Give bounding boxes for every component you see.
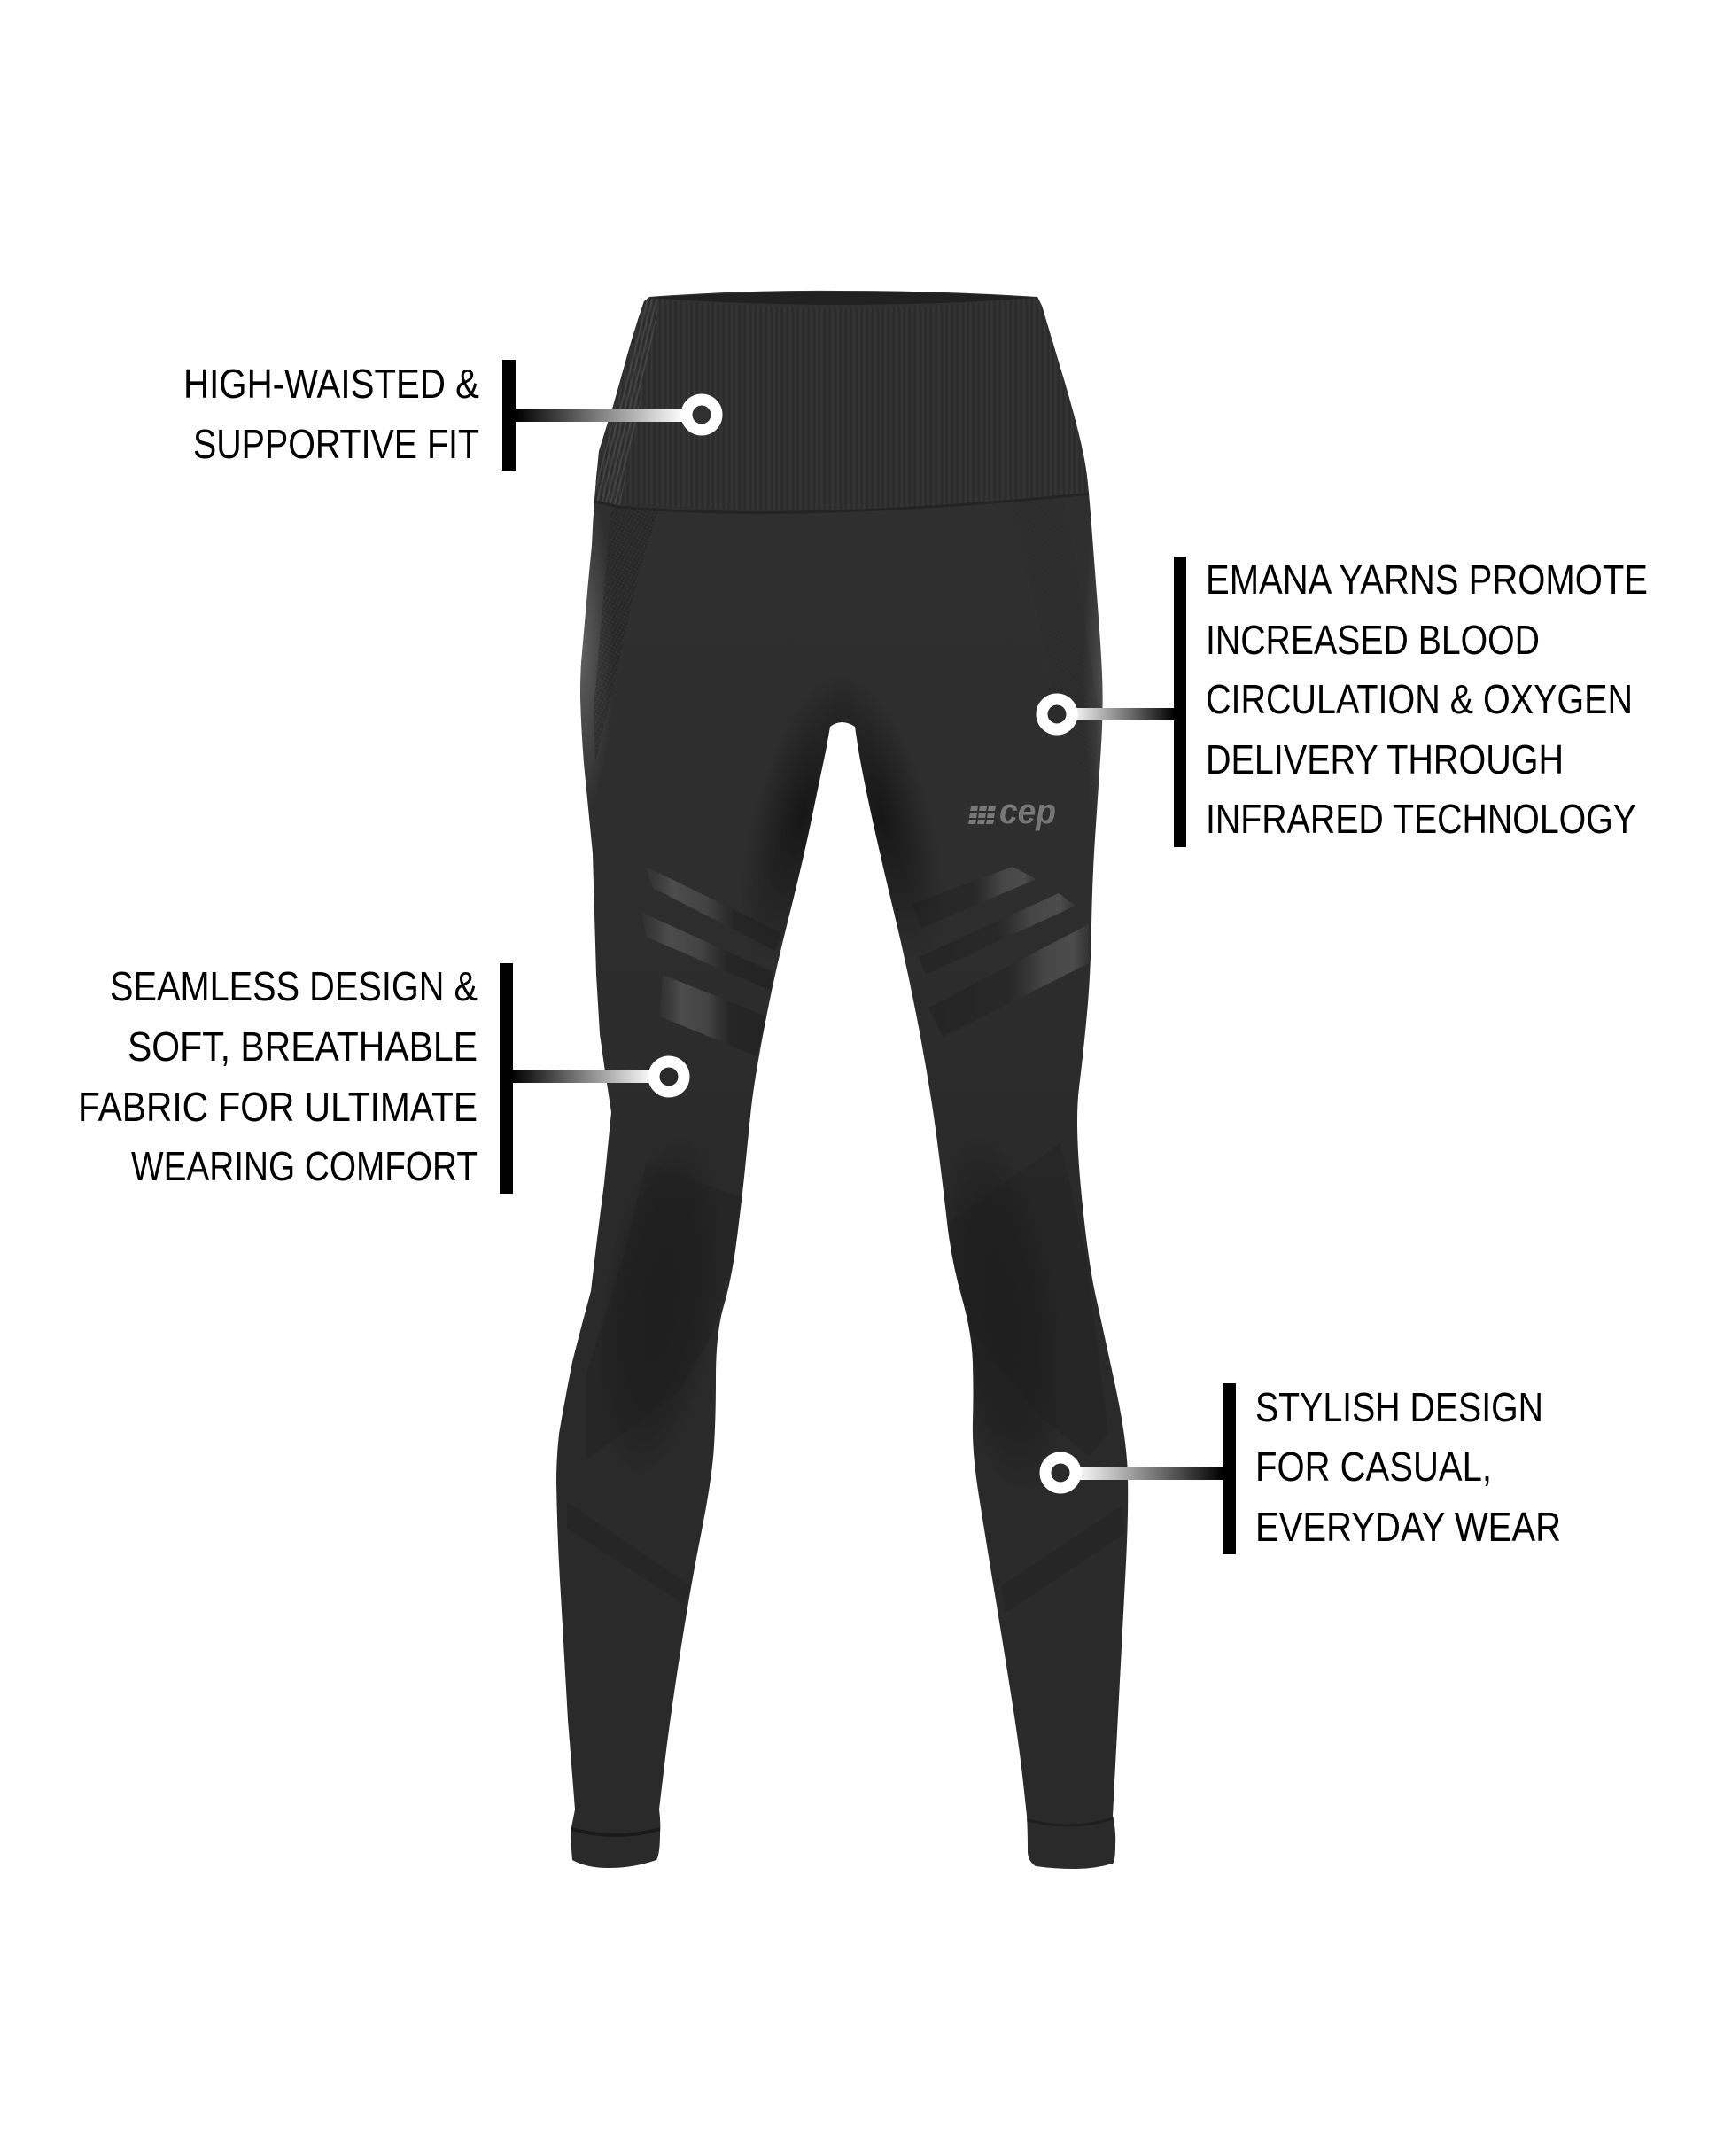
- right calf mesh strip: [1001, 1506, 1125, 1613]
- marker: [654, 1062, 684, 1092]
- leader line: [1070, 708, 1175, 720]
- right knee panel: [947, 1223, 953, 1258]
- callout text: [1255, 1384, 1561, 1550]
- callout bar: [1223, 1383, 1236, 1554]
- callout text: EMANA YARNS PROMOTE: [1206, 557, 1648, 603]
- leader line: [512, 1070, 654, 1083]
- waistband seam: [592, 494, 1091, 512]
- callout text: HIGH-WAISTED &: [183, 361, 479, 407]
- callout bar: [500, 963, 513, 1194]
- hip edge highlights: [580, 523, 605, 785]
- left hem: [571, 1827, 660, 1837]
- marker: [1045, 1458, 1076, 1488]
- callout text: CIRCULATION & OXYGEN: [1206, 676, 1633, 722]
- left knee shading: [579, 1119, 742, 1486]
- callout text: DELIVERY THROUGH: [1206, 736, 1564, 782]
- callout text: FABRIC FOR ULTIMATE: [78, 1084, 478, 1130]
- callout: seamless design: [78, 963, 684, 1194]
- inner thigh shading: [762, 720, 850, 936]
- leader line: [516, 409, 684, 422]
- leggings illustration: [556, 291, 1129, 1869]
- callout: stylish design: [1045, 1383, 1561, 1554]
- logo blocks: [968, 806, 996, 824]
- leggings silhouette: [556, 291, 1129, 1869]
- cep logo: [968, 792, 1056, 831]
- callout text: SUPPORTIVE FIT: [193, 421, 479, 467]
- right thigh mesh bands: [989, 867, 1036, 899]
- callout bar: [1174, 557, 1186, 847]
- right hip mesh panel: [1010, 498, 1099, 798]
- marker: [687, 400, 717, 430]
- leader line: [1076, 1467, 1223, 1480]
- callout text: SEAMLESS DESIGN &: [110, 963, 478, 1009]
- marker: [1042, 699, 1072, 729]
- callout text: INFRARED TECHNOLOGY: [1206, 796, 1636, 842]
- callout text: SOFT, BREATHABLE: [128, 1024, 478, 1070]
- left knee panel: [734, 1244, 736, 1263]
- left calf mesh strip: [567, 1502, 691, 1604]
- left hip mesh panel: [594, 508, 659, 762]
- left waistband side ribs: [592, 300, 660, 505]
- callout text: [183, 361, 479, 467]
- callout: emana yarns: [1042, 557, 1648, 847]
- callout text: INCREASED BLOOD: [1206, 617, 1540, 663]
- callout text: [1206, 557, 1648, 842]
- callout text: [78, 963, 478, 1189]
- callout text: FOR CASUAL,: [1255, 1444, 1492, 1490]
- waistband ribbing: [589, 297, 1094, 511]
- garment details: [556, 291, 1129, 1869]
- right hem: [1026, 1817, 1114, 1827]
- left thigh mesh bands: [652, 870, 718, 922]
- inner waistband back: [648, 292, 1037, 305]
- callout text: STYLISH DESIGN: [1255, 1384, 1543, 1430]
- callout: high-waisted fit: [183, 360, 717, 471]
- callout bar: [502, 360, 516, 471]
- callout text: WEARING COMFORT: [131, 1143, 478, 1189]
- callout text: EVERYDAY WEAR: [1255, 1504, 1561, 1550]
- right knee shading: [946, 1212, 1024, 1416]
- logo wordmark: cep: [999, 792, 1056, 831]
